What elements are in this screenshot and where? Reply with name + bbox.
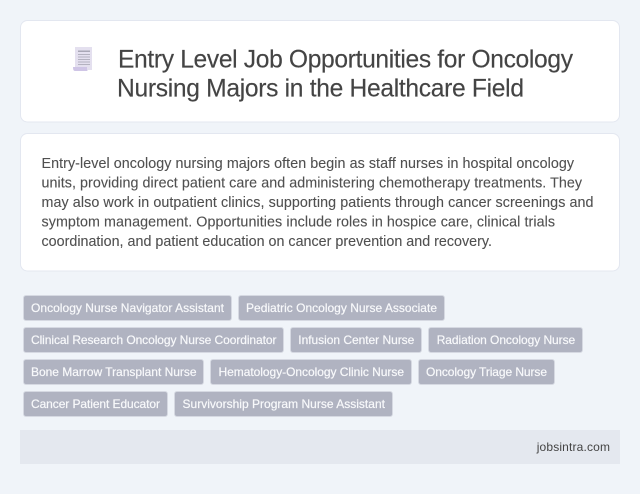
tag: Infusion Center Nurse <box>290 328 422 352</box>
title: Nursing Majors in the Healthcare Field <box>117 76 524 102</box>
title: Entry Level Job Opportunities for Oncology <box>118 46 574 74</box>
tag: Infusion Center Nurse: Infusion Center Nurse <box>298 333 415 347</box>
tag: Oncology Nurse Navigator Assistant: Oncology Nurse Navigator Assistant <box>31 301 225 315</box>
tag: Survivorship Program Nurse Assistant <box>174 392 392 416</box>
tag: Hematology-Oncology Clinic Nurse <box>210 360 412 384</box>
tag: Clinical Research Oncology Nurse Coordinator: Clinical Research Oncology Nurse Coordinator <box>31 333 276 347</box>
tag: Oncology Nurse Navigator Assistant <box>24 296 232 320</box>
tag: Bone Marrow Transplant Nurse: Bone Marrow Transplant Nurse <box>31 365 197 379</box>
description text: coordination, and patient education on cancer prevention and recovery. <box>42 234 492 250</box>
tag: Bone Marrow Transplant Nurse <box>24 360 204 384</box>
description text <box>42 156 594 250</box>
tag: Radiation Oncology Nurse <box>428 328 582 352</box>
tag: Cancer Patient Educator: Cancer Patient Educator <box>31 397 160 411</box>
panel: header card <box>20 20 620 122</box>
tag list <box>24 296 582 416</box>
tag: Pediatric Oncology Nurse Associate: Pediatric Oncology Nurse Associate <box>246 301 437 315</box>
description text: Entry-level oncology nursing majors often begin as staff nurses in hospital oncology <box>42 156 575 172</box>
panel: description card <box>20 134 620 271</box>
tag: Oncology Triage Nurse <box>418 360 554 384</box>
description text: units, providing direct patient care and administering chemotherapy treatments. They <box>42 176 583 192</box>
description text: symptom management. Opportunities include roles in hospice care, clinical trials <box>42 214 555 230</box>
footer bar <box>20 430 620 464</box>
footer source text: jobsintra.com <box>536 440 610 454</box>
tag: Cancer Patient Educator <box>24 392 168 416</box>
tag: Hematology-Oncology Clinic Nurse: Hematology-Oncology Clinic Nurse <box>218 365 404 379</box>
icon: document scroll <box>73 47 92 71</box>
tag: Clinical Research Oncology Nurse Coordinator <box>24 328 284 352</box>
tag: Radiation Oncology Nurse: Radiation Oncology Nurse <box>437 333 576 347</box>
tag: Pediatric Oncology Nurse Associate <box>238 296 444 320</box>
description text: may also work in outpatient clinics, supporting patients through cancer screenings and <box>42 195 594 211</box>
tag: Oncology Triage Nurse: Oncology Triage Nurse <box>426 365 547 379</box>
title <box>117 46 574 102</box>
tag: Survivorship Program Nurse Assistant: Survivorship Program Nurse Assistant <box>182 397 386 411</box>
